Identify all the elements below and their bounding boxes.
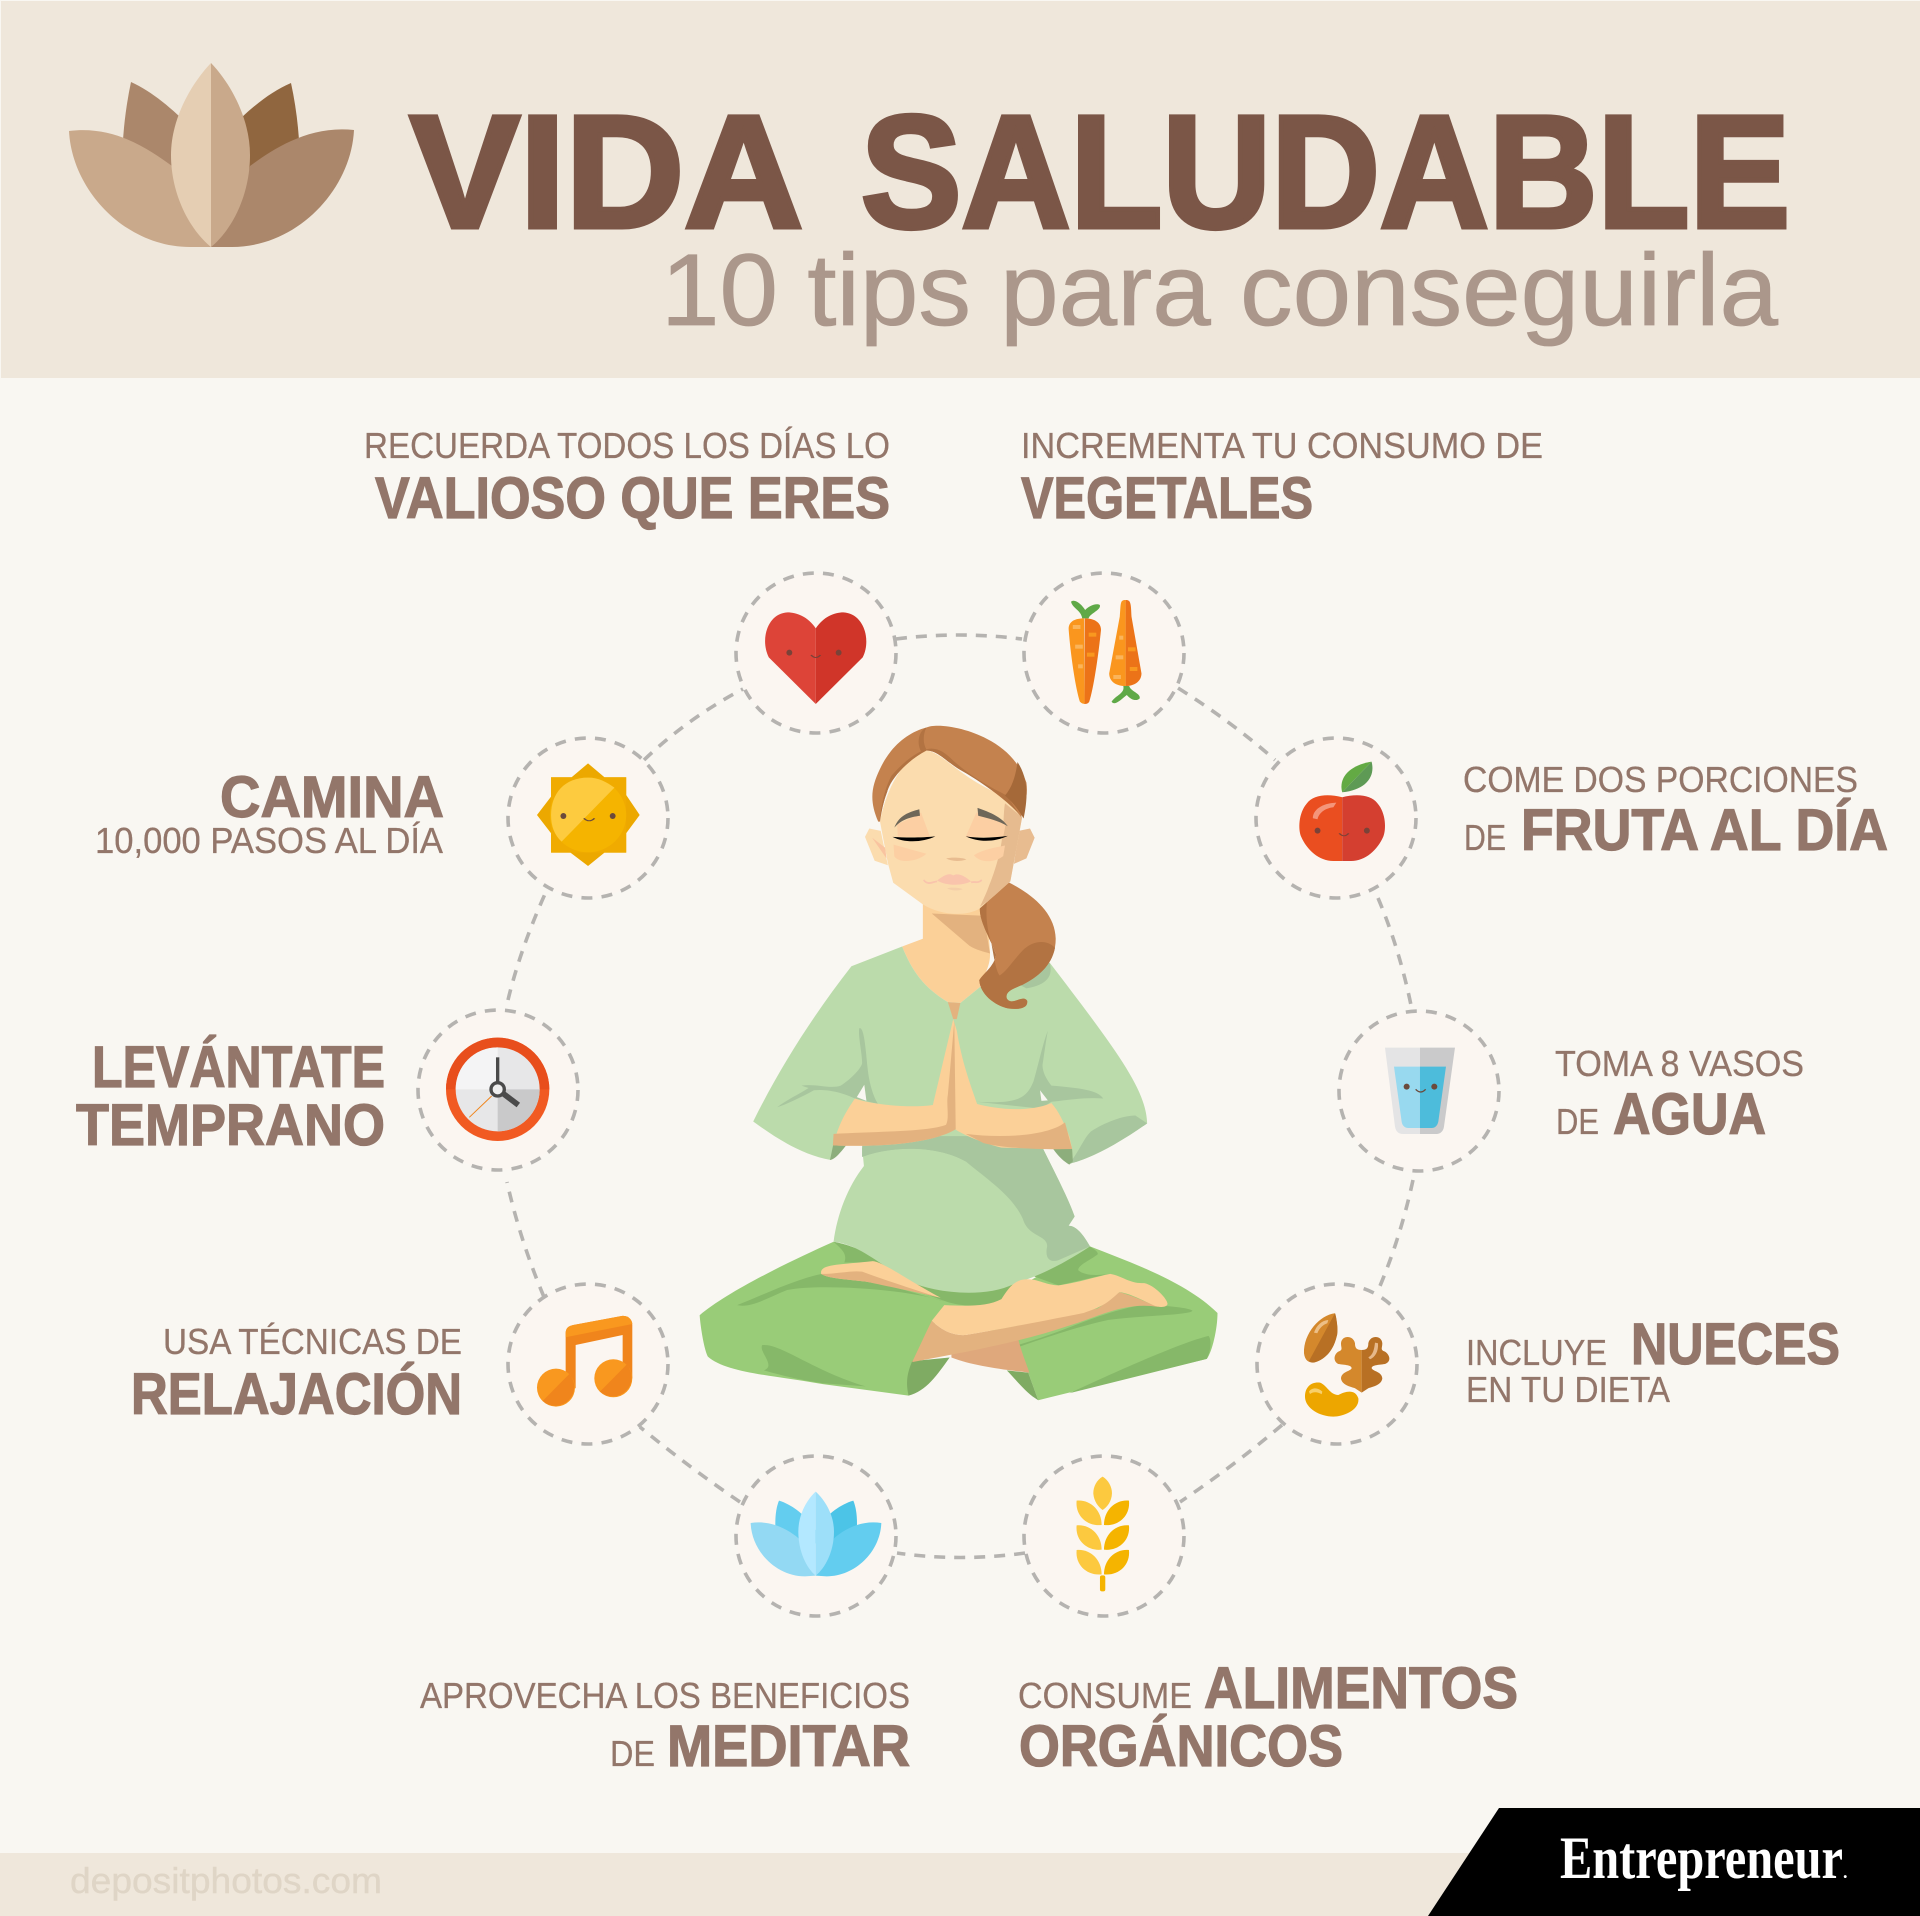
text: temprano: TEMPRANO (76, 1093, 385, 1158)
text: meditar (420, 1675, 910, 1779)
text: meditar: MEDITAR (667, 1714, 910, 1779)
text: organicos (1018, 1656, 1518, 1779)
icon: sun (537, 763, 640, 866)
watermark: depositphotos.com (70, 1860, 382, 1901)
icon: music note (537, 1316, 632, 1407)
text: camina: 10,000 PASOS AL DÍA (95, 820, 443, 861)
title: VIDA (410, 82, 803, 261)
logo: Entrepreneur (1428, 1808, 1920, 1916)
face (880, 751, 1022, 914)
shirt top and sleeves (753, 947, 1147, 1165)
text: relajacion (131, 1321, 462, 1427)
connectors between tips (507, 635, 1413, 1558)
text: temprano (76, 1035, 385, 1158)
logo: Entrepreneur: . (1843, 1862, 1848, 1882)
text: relajacion: RELAJACIÓN (131, 1362, 462, 1427)
icon: header lotus (69, 63, 354, 247)
text: meditar: DE (610, 1733, 655, 1774)
icon: heart (765, 612, 866, 704)
text: temprano: LEVÁNTATE (92, 1035, 385, 1100)
text: vegetales: INCREMENTA TU CONSUMO DE (1021, 425, 1543, 466)
text: fruta (1463, 759, 1888, 863)
icon: clock (446, 1038, 549, 1141)
text: nueces (1466, 1312, 1840, 1410)
text: fruta: FRUTA AL DÍA (1521, 798, 1888, 863)
pants (700, 1242, 1217, 1400)
icon: carrots (1069, 600, 1141, 704)
text: meditar: APROVECHA LOS BENEFICIOS (420, 1675, 910, 1716)
illustration: meditating woman (700, 726, 1217, 1400)
icon: nuts (1304, 1313, 1389, 1417)
icon: apple (1299, 762, 1385, 861)
text: nueces: EN TU DIETA (1466, 1369, 1670, 1410)
text: agua: AGUA (1613, 1082, 1766, 1147)
icon: glass of water (1385, 1048, 1455, 1134)
praying hands (833, 1002, 1072, 1149)
text: organicos: CONSUME (1018, 1675, 1192, 1716)
neck (902, 902, 990, 1003)
text: vegetales: VEGETALES (1021, 466, 1313, 531)
text: organicos: ALIMENTOS (1204, 1656, 1518, 1721)
text: relajacion: USA TÉCNICAS DE (163, 1321, 462, 1362)
ears (865, 829, 1035, 865)
text: fruta: DE (1464, 817, 1506, 858)
footer bar (0, 1853, 1920, 1916)
title (410, 82, 1790, 261)
text: fruta: COME DOS PORCIONES (1463, 759, 1858, 800)
tip circles (418, 573, 1499, 1616)
crossed legs (912, 1274, 1167, 1373)
text: agua: DE (1556, 1101, 1599, 1142)
hair (872, 726, 1027, 822)
text: valioso: RECUERDA TODOS LOS DÍAS LO (364, 425, 890, 466)
subtitle: 10 tips para conseguirla (661, 233, 1778, 347)
text: valioso (364, 425, 890, 531)
foot left (821, 1261, 941, 1298)
panel: header (1, 1, 1920, 378)
text: organicos: ORGÁNICOS (1019, 1714, 1343, 1779)
text: camina (95, 765, 444, 861)
text: camina: CAMINA (220, 765, 444, 830)
icon: blue lotus (751, 1492, 881, 1576)
text: vegetales (1021, 425, 1543, 531)
title: SALUDABLE (861, 82, 1790, 261)
text: nueces: NUECES (1631, 1312, 1840, 1377)
text: valioso: VALIOSO QUE ERES (375, 466, 890, 531)
icon: wheat (1076, 1477, 1129, 1591)
text: agua: TOMA 8 VASOS (1555, 1043, 1804, 1084)
shirt body (834, 1148, 1090, 1293)
text: agua (1555, 1043, 1804, 1147)
ponytail (979, 881, 1056, 1009)
logo: Entrepreneur: Entrepreneur (1560, 1825, 1843, 1891)
text: nueces: INCLUYE (1466, 1332, 1607, 1373)
